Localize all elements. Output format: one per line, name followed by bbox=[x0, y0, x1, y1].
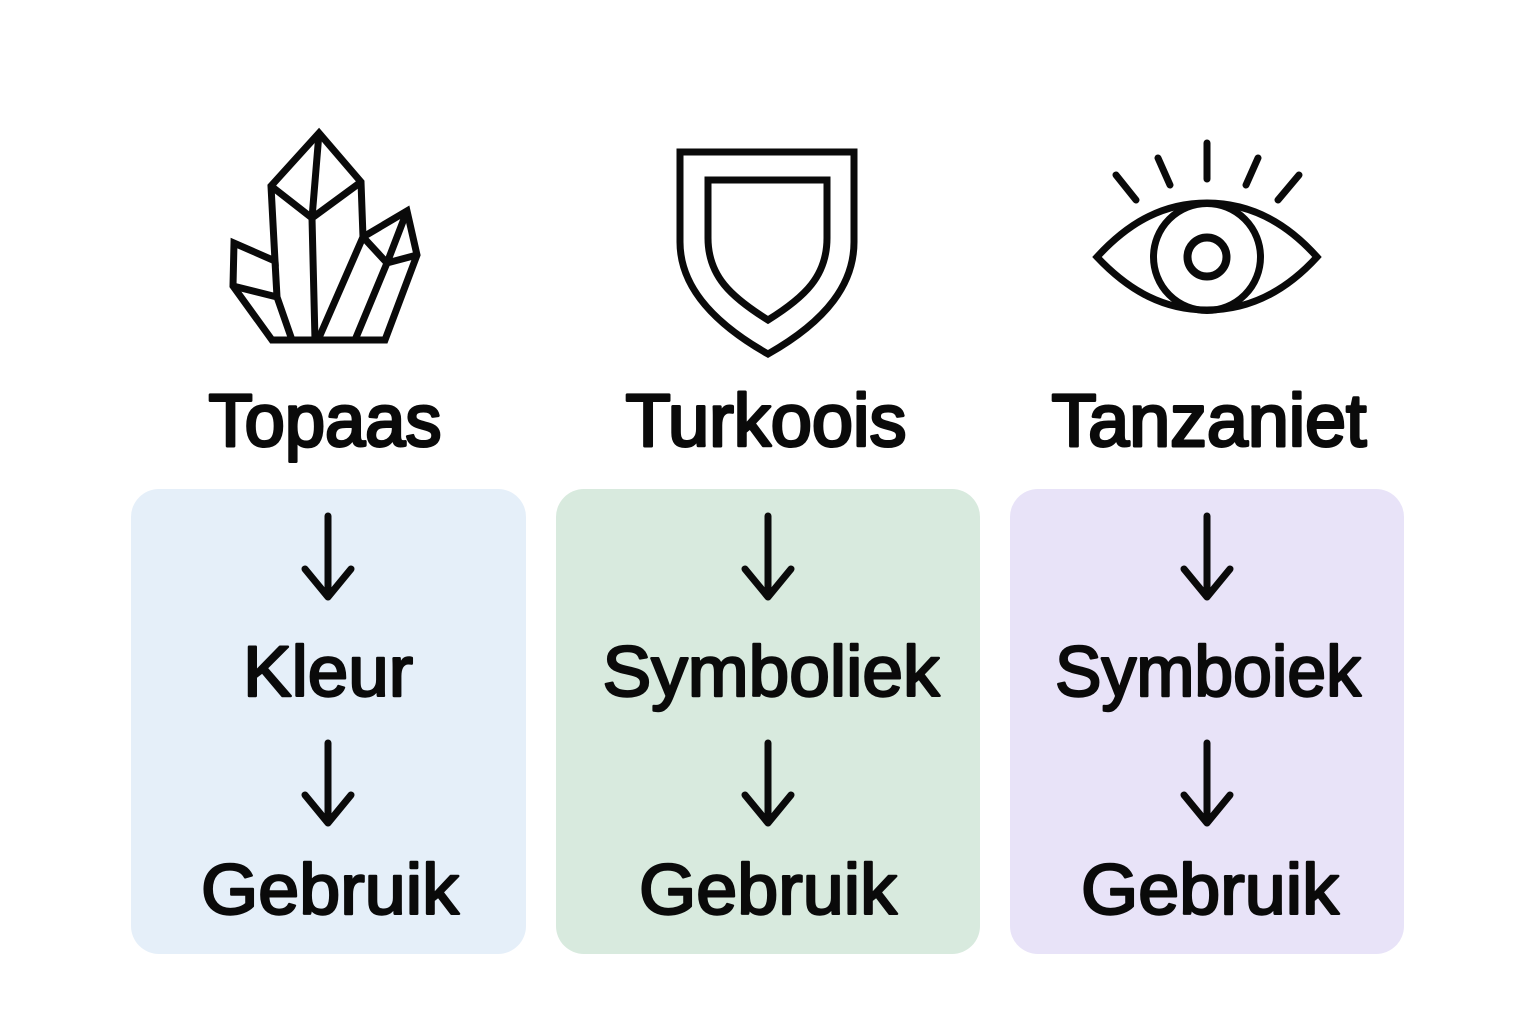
column: Topaas bbox=[131, 133, 526, 954]
heading: Topaas: Topaas bbox=[208, 379, 442, 462]
column: Turkoois bbox=[556, 152, 980, 954]
panel: Tanzaniet bbox=[1010, 489, 1404, 954]
arrow bbox=[745, 743, 791, 823]
label: Symboiek: Symboiek bbox=[1055, 633, 1361, 712]
arrow bbox=[745, 516, 791, 597]
arrow bbox=[305, 743, 351, 823]
heading: Tanzaniet: Tanzaniet bbox=[1052, 379, 1367, 462]
column: Tanzaniet bbox=[1010, 143, 1404, 954]
label: Symboliek: Symboliek bbox=[602, 633, 940, 712]
heading: Turkoois: Turkoois bbox=[626, 379, 906, 462]
panel: Turkoois bbox=[556, 489, 980, 954]
label: Gebruik: Gebruik bbox=[639, 851, 898, 930]
icon: crystal cluster bbox=[233, 133, 417, 340]
label: Kleur: Kleur bbox=[243, 633, 413, 712]
icon: eye with rays bbox=[1097, 143, 1317, 310]
arrow bbox=[305, 516, 351, 597]
arrow bbox=[1184, 743, 1230, 823]
label: Gebruik: Gebruik bbox=[1081, 851, 1340, 930]
icon: shield bbox=[680, 152, 854, 354]
label: Gebruik: Gebruik bbox=[201, 851, 460, 930]
arrow bbox=[1184, 516, 1230, 597]
panel: Topaas bbox=[131, 489, 526, 954]
